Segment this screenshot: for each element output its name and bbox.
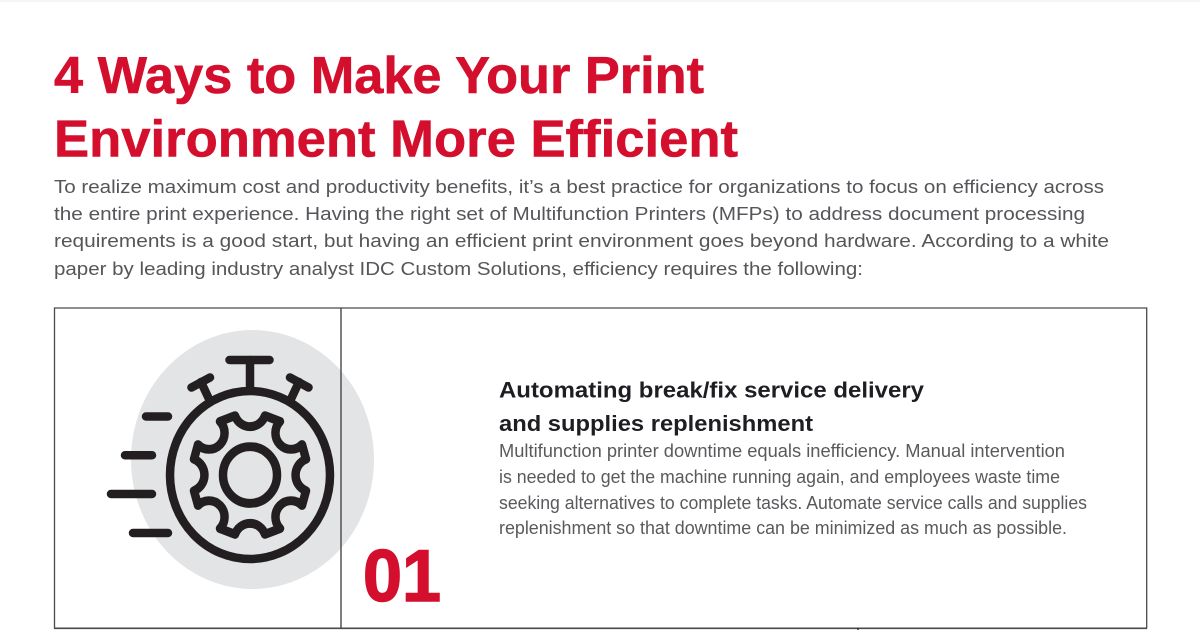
heading: automating: and supplies replenishment	[499, 411, 814, 436]
number 01: 01	[363, 536, 441, 617]
intro paragraph: requirements is a good start, but having an efficient print environment goes beyond hardware. According to a white	[54, 230, 1109, 251]
title: Environment More Efficient	[54, 110, 738, 168]
intro paragraph: paper by leading industry analyst IDC Custom Solutions, efficiency requires the following:	[54, 258, 863, 279]
description text: Multifunction printer downtime equals inefficiency. Manual intervention	[499, 441, 1065, 461]
speed lines	[111, 416, 168, 533]
divider over circle	[340, 308, 342, 628]
intro paragraph	[54, 176, 1109, 279]
icon: grey background circle	[131, 330, 374, 589]
stopwatch top buttons	[192, 360, 308, 399]
description text: seeking alternatives to complete tasks. Automate service calls and supplies	[499, 493, 1087, 513]
description text: replenishment so that downtime can be minimized as much as possible.	[499, 518, 1067, 538]
title: 4 Ways to Make Your Print	[54, 47, 704, 105]
gear	[194, 416, 306, 534]
title	[54, 47, 738, 168]
intro paragraph: the entire print experience. Having the right set of Multifunction Printers (MFPs) to address document processing	[54, 203, 1085, 224]
icon: stopwatch with gear	[111, 360, 330, 559]
heading: automating	[499, 378, 925, 436]
intro paragraph: To realize maximum cost and productivity benefits, it’s a best practice for organizations to focus on efficiency across	[54, 176, 1104, 197]
description text: is needed to get the machine running again, and employees waste time	[499, 467, 1060, 487]
stopwatch body	[170, 391, 330, 559]
description text	[499, 441, 1087, 538]
heading: automating: Automating break/fix service delivery	[499, 378, 925, 402]
panel: table frame	[54, 308, 1147, 630]
